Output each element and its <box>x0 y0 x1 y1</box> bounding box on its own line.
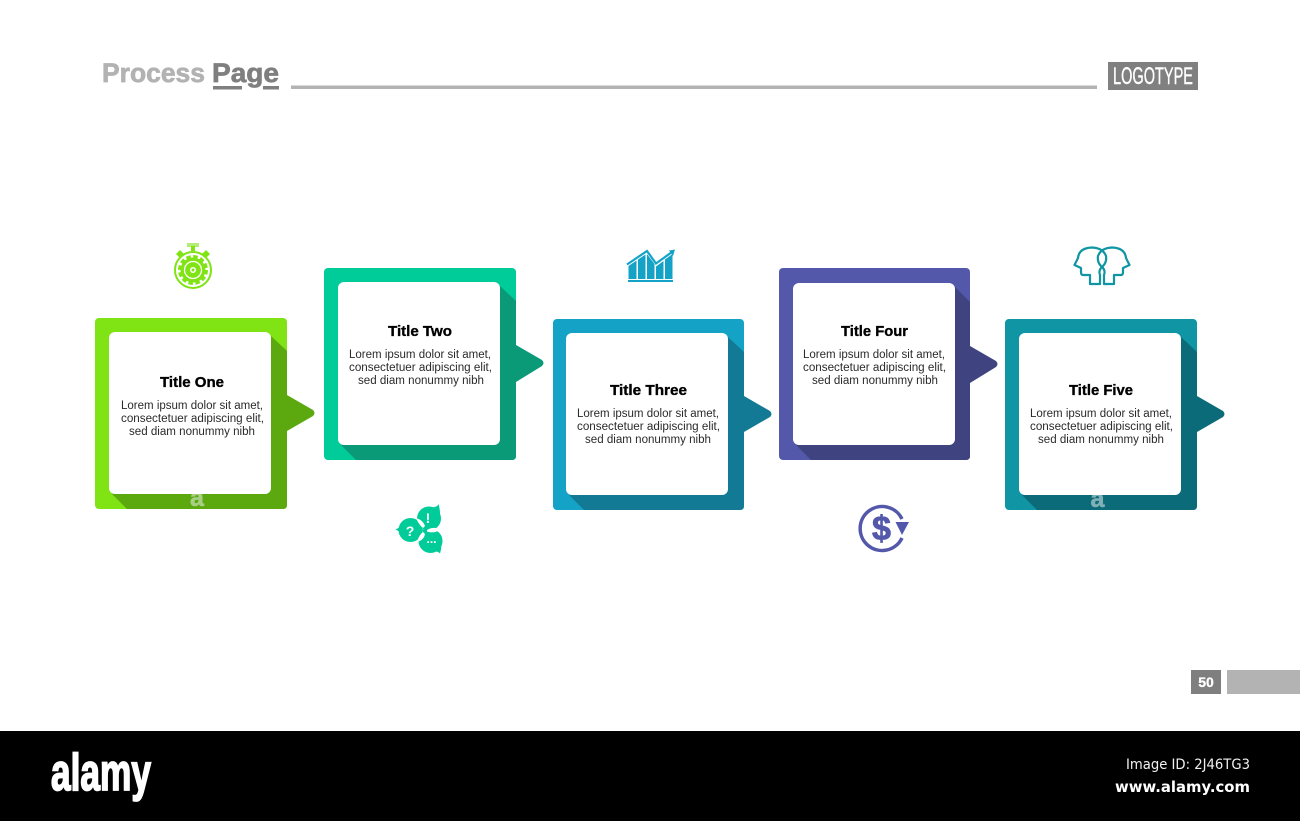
logotype badge <box>1108 62 1198 90</box>
text block: sed diam nonummy nibh <box>585 434 711 446</box>
heading: Title Four <box>841 323 908 340</box>
inner panel <box>566 333 728 495</box>
card 3 <box>553 319 772 510</box>
icon: speech bubbles: ... <box>426 532 437 546</box>
heading: Title Two <box>388 323 452 340</box>
card panel <box>324 268 516 460</box>
card panel <box>553 319 744 510</box>
inner panel <box>109 332 271 494</box>
icon: speech bubbles <box>396 504 442 554</box>
icon: dollar cycle <box>860 506 909 550</box>
text block: consectetuer adipiscing elit, <box>577 421 720 433</box>
page number: 50 <box>1198 674 1214 690</box>
text block: sed diam nonummy nibh <box>358 375 484 387</box>
text block <box>121 400 264 438</box>
text block: consectetuer adipiscing elit, <box>349 362 492 374</box>
text block: sed diam nonummy nibh <box>129 426 255 438</box>
icon: two heads <box>1074 248 1130 284</box>
icon: speech bubbles: ? <box>406 523 414 539</box>
card panel <box>95 318 287 509</box>
image id: Image ID: 2J46TG3 <box>1126 757 1250 773</box>
alamy logo: alamy <box>51 744 151 802</box>
icon: bar chart with trend line <box>627 250 675 282</box>
heading: Title One <box>160 374 224 391</box>
icon: speech bubbles: ! <box>426 510 430 526</box>
card 1 <box>95 318 314 512</box>
card 4 <box>779 268 998 460</box>
arrow and shadow <box>1022 337 1224 510</box>
website: www.alamy.com <box>1115 778 1250 796</box>
icon: stopwatch gear <box>175 243 211 288</box>
text block: Lorem ipsum dolor sit amet, <box>1030 408 1172 420</box>
card panel <box>779 268 970 460</box>
icon: dollar cycle: $ <box>872 510 891 548</box>
inner panel <box>338 282 500 445</box>
card 2 <box>324 268 544 460</box>
logotype badge: LOGOTYPE <box>1113 63 1193 90</box>
title: Page <box>212 58 279 88</box>
text block <box>803 349 946 387</box>
header <box>102 58 1198 90</box>
text block <box>1030 408 1173 446</box>
page number <box>1191 670 1221 694</box>
heading: Title Five <box>1069 382 1133 399</box>
heading: Title Three <box>610 382 687 399</box>
text block: sed diam nonummy nibh <box>1038 434 1164 446</box>
arrow and shadow <box>112 336 314 509</box>
watermark mark: a <box>190 484 205 512</box>
watermark mark: a <box>1090 485 1106 513</box>
text block: consectetuer adipiscing elit, <box>803 362 946 374</box>
arrow and shadow <box>569 337 772 510</box>
text block: consectetuer adipiscing elit, <box>1030 421 1173 433</box>
text block: Lorem ipsum dolor sit amet, <box>121 400 263 412</box>
footer band <box>0 731 1300 821</box>
text block: Lorem ipsum dolor sit amet, <box>577 408 719 420</box>
text block <box>349 349 492 387</box>
text block <box>577 408 720 446</box>
text block: Lorem ipsum dolor sit amet, <box>349 349 491 361</box>
inner panel <box>1019 333 1181 495</box>
text block: sed diam nonummy nibh <box>812 375 938 387</box>
text block: Lorem ipsum dolor sit amet, <box>803 349 945 361</box>
card panel <box>1005 319 1197 510</box>
card 5 <box>1005 319 1224 513</box>
title: Process <box>102 58 205 88</box>
arrow and shadow <box>796 287 998 460</box>
text block: consectetuer adipiscing elit, <box>121 413 264 425</box>
title <box>102 58 279 90</box>
inner panel <box>793 283 955 445</box>
arrow and shadow <box>341 286 544 460</box>
